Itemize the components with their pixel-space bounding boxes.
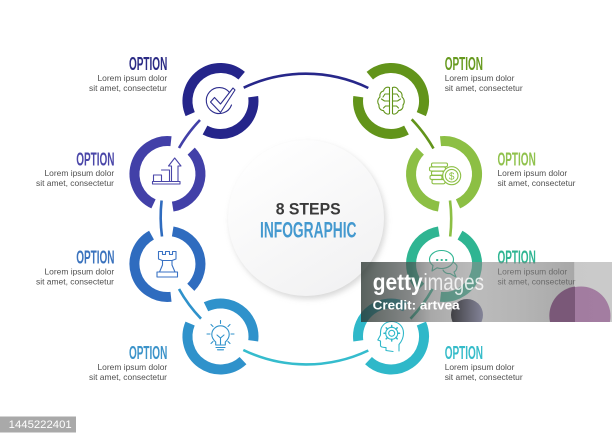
label 1: sit amet, consectetur	[89, 83, 167, 93]
label 1: Lorem ipsum dolor	[98, 73, 167, 83]
icon: chess rook	[157, 252, 178, 277]
label 8	[445, 343, 523, 382]
label 3: sit amet, consectetur	[36, 276, 114, 286]
label 7: OPTION	[498, 248, 536, 268]
connector: bottom	[243, 350, 368, 364]
watermark credit: Credit: artvea	[373, 298, 461, 312]
label 2	[36, 150, 114, 188]
label 1	[89, 54, 167, 93]
connector: right	[450, 200, 451, 236]
ring 7: emerald	[411, 231, 477, 297]
label 4	[89, 343, 167, 382]
ring 8: teal	[358, 303, 424, 369]
image id badge: 1445222401	[9, 419, 72, 431]
connector: lower left	[179, 289, 201, 319]
label 3	[36, 248, 114, 286]
label 8: Lorem ipsum dolor	[445, 362, 515, 372]
label 4: OPTION	[129, 343, 167, 363]
ring 2: indigo	[134, 141, 200, 207]
center title: 8 steps: 8 STEPS	[276, 200, 341, 218]
image id badge	[0, 416, 76, 432]
label 7: sit amet, consectetur	[498, 276, 576, 286]
label 5	[445, 54, 523, 93]
icon: growth chart	[152, 158, 181, 184]
dollar sign: $	[449, 171, 455, 182]
label 4: sit amet, consectetur	[89, 372, 167, 382]
label 2: sit amet, consectetur	[36, 178, 114, 188]
label 2: OPTION	[76, 150, 114, 170]
label 5: Lorem ipsum dolor	[445, 73, 515, 83]
center title: infographic: INFOGRAPHIC	[260, 217, 357, 242]
icon: speech bubbles	[430, 250, 457, 277]
label 2: Lorem ipsum dolor	[44, 168, 114, 178]
ring 1: navy	[187, 68, 253, 134]
label 8: OPTION	[445, 343, 483, 363]
label 3: OPTION	[76, 248, 114, 268]
connector: upper right	[412, 119, 434, 148]
ring 6: light green	[411, 141, 477, 207]
label 4: Lorem ipsum dolor	[98, 362, 167, 372]
icon: light bulb	[207, 320, 234, 350]
connector: lower right	[410, 289, 432, 319]
connector: left	[161, 200, 162, 236]
label 7	[498, 248, 576, 286]
ring 4: sky blue	[187, 303, 253, 369]
icon: check mark	[206, 88, 235, 114]
label 6	[498, 150, 576, 188]
icon: brain	[378, 87, 404, 114]
watermark wordmark: getty	[373, 269, 423, 295]
label 3: Lorem ipsum dolor	[44, 266, 114, 276]
watermark overlay: images	[424, 269, 484, 295]
connector: upper left	[179, 120, 200, 148]
ring 3: blue	[134, 231, 200, 297]
label 5: sit amet, consectetur	[445, 83, 523, 93]
center circle	[228, 140, 386, 299]
icon: coins	[430, 163, 461, 185]
ring 5: dark green	[358, 68, 424, 134]
label 6: sit amet, consectetur	[498, 178, 576, 188]
label 6: OPTION	[498, 150, 536, 170]
connector: top	[244, 74, 368, 88]
label 8: sit amet, consectetur	[445, 372, 523, 382]
label 7: Lorem ipsum dolor	[498, 266, 567, 276]
watermark overlay	[361, 262, 612, 322]
icon: head with gear	[378, 322, 404, 352]
label 1: OPTION	[129, 54, 167, 74]
label 6: Lorem ipsum dolor	[498, 168, 567, 178]
label 5: OPTION	[445, 54, 483, 74]
